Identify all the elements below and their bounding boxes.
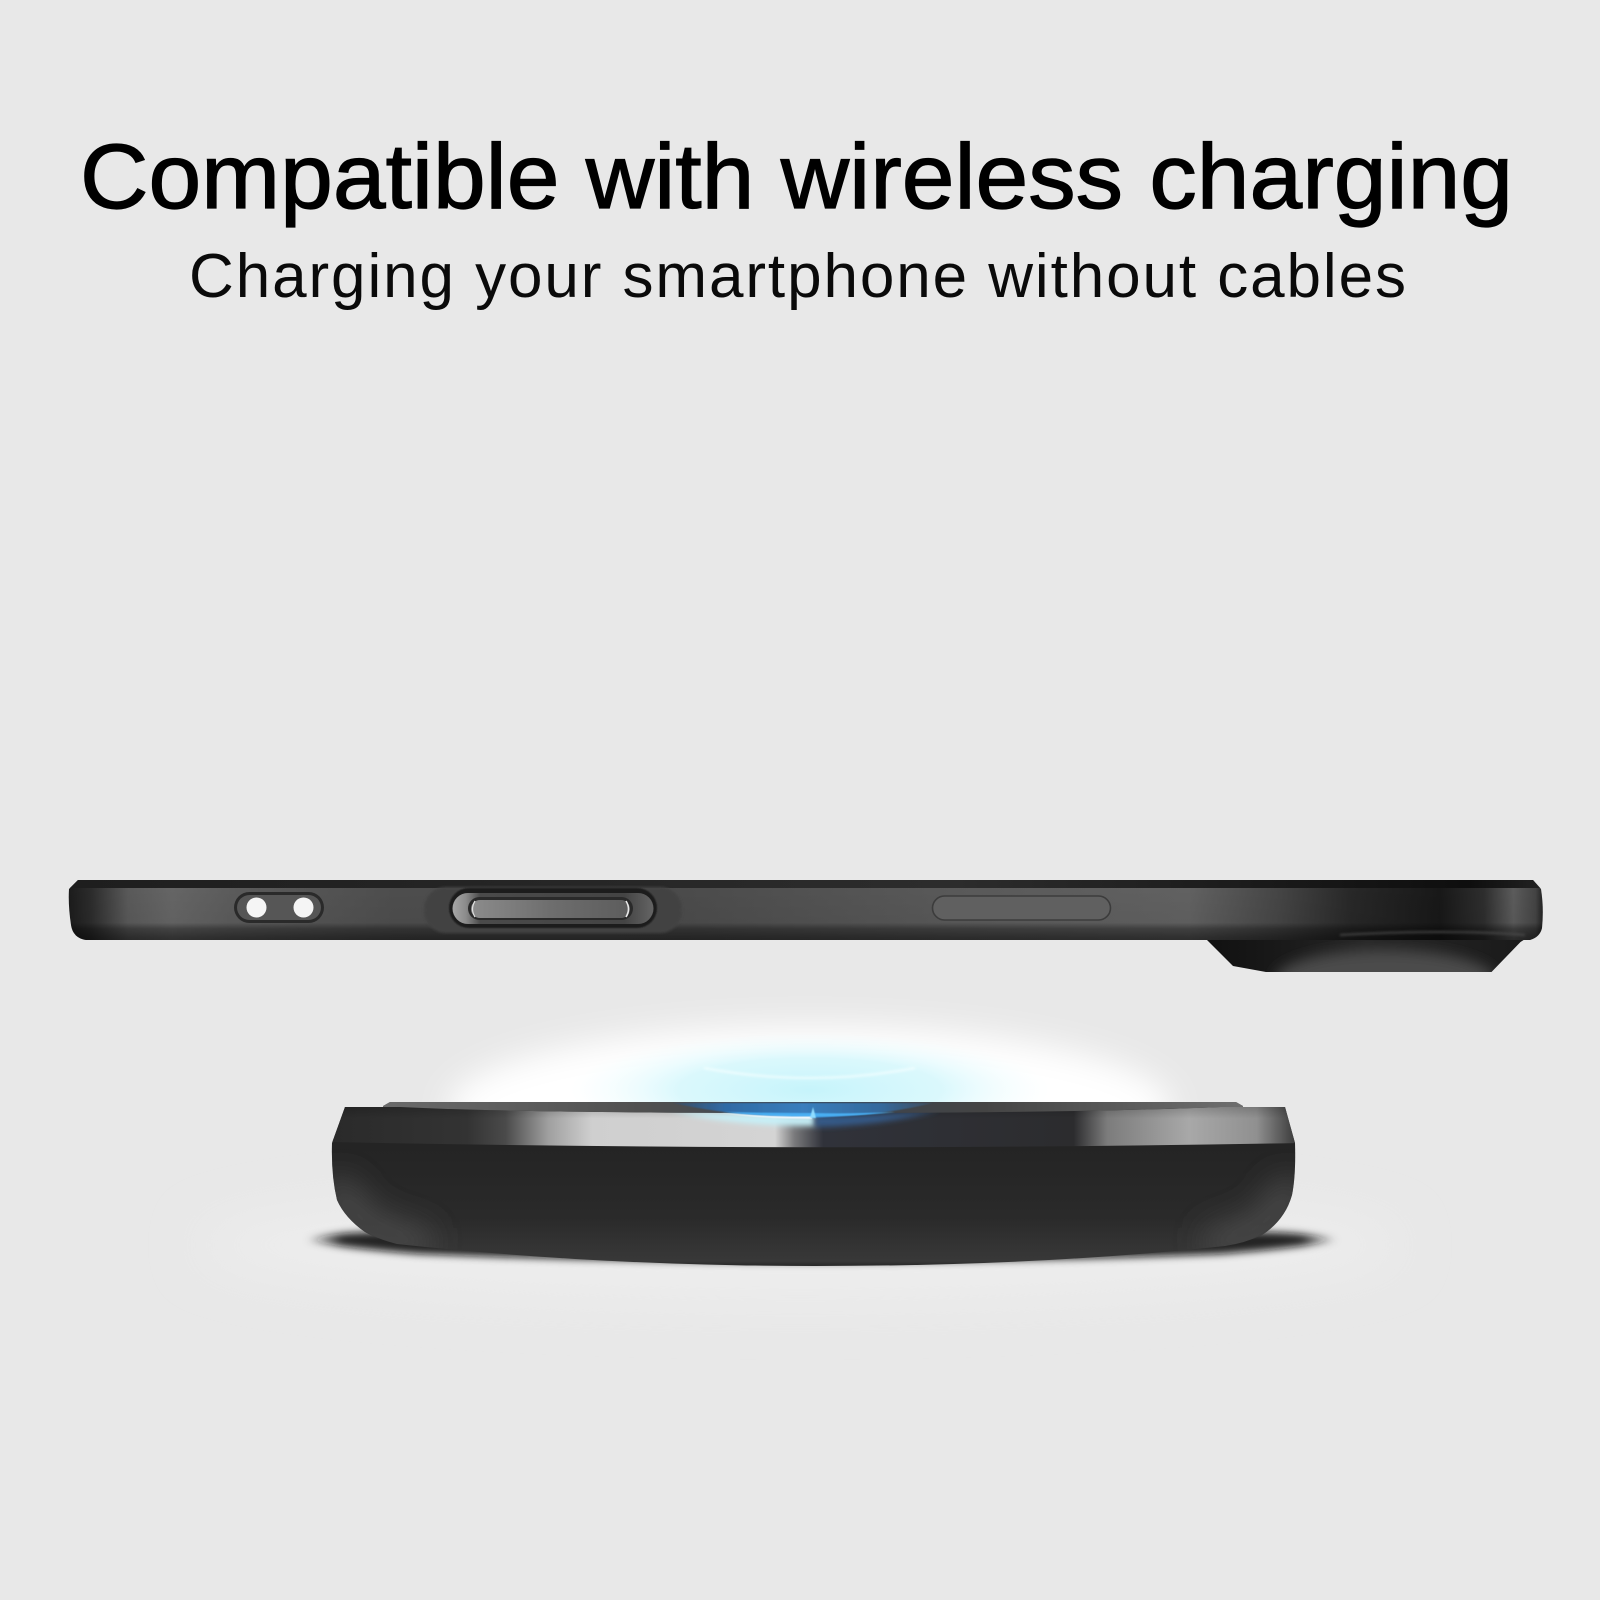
smartphone in case, side view [68,880,1543,972]
charger shadow [306,1232,1338,1262]
charger LED [810,1107,816,1118]
camera bump [1207,940,1524,972]
power button [424,887,682,933]
subtitle: Charging your smartphone without cables [189,242,1406,311]
flash hole right [294,898,314,918]
charger top plate rim [383,1102,1243,1113]
white crescent [720,1113,812,1119]
wireless charging glow [448,1026,1172,1190]
body underside light edge [1340,932,1525,935]
floor glow [200,1190,1400,1300]
flash hole left [246,898,266,918]
charger body [325,1100,1305,1270]
blue reflection, right of band centre [815,1110,940,1127]
flash cutout [234,892,324,923]
blue light crescent [673,1103,933,1118]
volume button [932,896,1110,920]
plate centre [383,1102,1243,1113]
phone body [60,880,1550,945]
wireless charger [325,1100,1305,1270]
lower edge sheen [335,1180,1292,1245]
metal band [330,1106,1300,1147]
title: Compatible with wireless charging [80,126,1513,228]
pale cyan reflection, left of band centre [668,1110,815,1126]
